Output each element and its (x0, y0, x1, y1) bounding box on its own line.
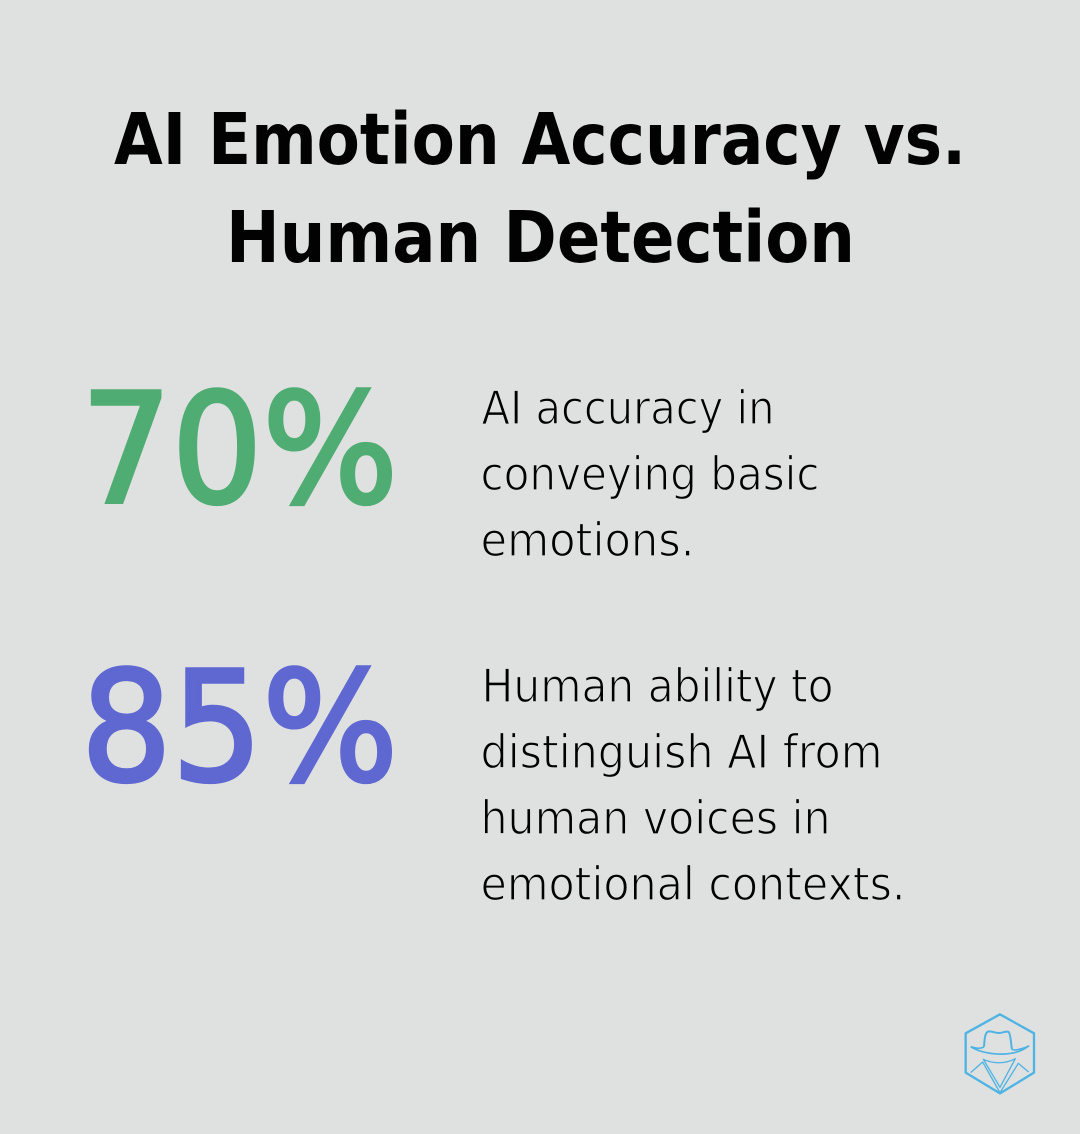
title (114, 98, 966, 279)
title: AI Emotion Accuracy vs. (114, 98, 966, 181)
icon: logo hexagon with hat (966, 1014, 1034, 1093)
description: human ability: emotional contexts. (480, 857, 906, 911)
description: human ability: human voices in (480, 791, 830, 845)
description: AI accuracy: emotions. (480, 513, 694, 567)
stat: 70%: 70% (81, 361, 398, 538)
title: Human Detection (226, 196, 855, 279)
description: human ability: distinguish AI from (480, 725, 882, 779)
stat: 85%: 85% (81, 639, 398, 816)
description: human ability: Human ability to (482, 659, 834, 713)
description: AI accuracy: conveying basic (480, 447, 820, 501)
description: AI accuracy (480, 381, 820, 567)
description: AI accuracy: AI accuracy in (482, 381, 774, 435)
description: human ability (480, 659, 906, 911)
